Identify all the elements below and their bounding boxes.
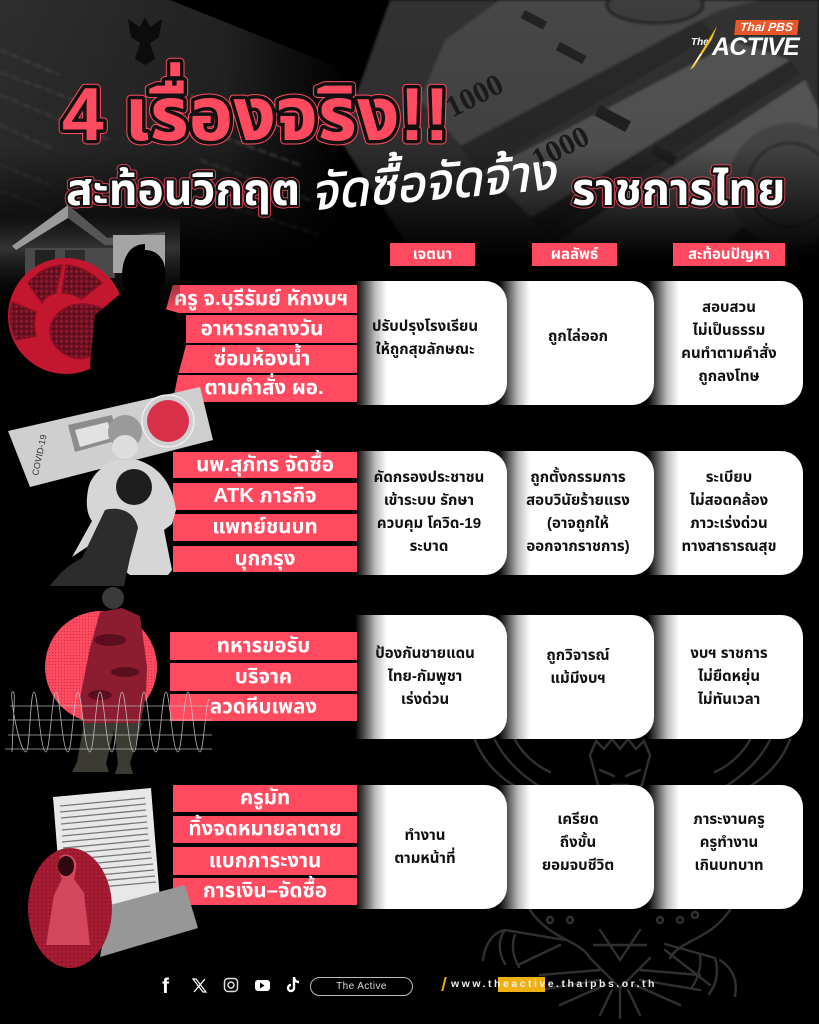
- teacher silhouette: [90, 244, 186, 405]
- row 2 cards: ทางสาธารณสุข: [682, 538, 776, 555]
- house: [0, 205, 180, 310]
- lunch tray: [8, 258, 124, 374]
- row 2 cards: [356, 451, 803, 575]
- logo: Thai PBS The Active: The: [691, 37, 709, 48]
- row 2 labels: นพ.สุภัทร จัดซื้อ: [196, 452, 334, 476]
- row 2 cards: ถูกตั้งกรรมการ: [530, 469, 626, 486]
- title: 4 เรื่องจริง!!: [62, 62, 450, 156]
- red portrait: [28, 848, 112, 968]
- row 4 labels: [173, 785, 357, 905]
- title: ราชการไทย: [572, 164, 785, 215]
- footer social icons: [162, 975, 299, 998]
- row 1 cards: [356, 281, 803, 405]
- row 4 labels: การเงิน–จัดซื้อ: [203, 879, 327, 902]
- row 3 cards: ป้องกันชายแดน: [375, 644, 475, 662]
- row 1 cards: ไม่เป็นธรรม: [693, 322, 765, 339]
- grey envelope: [100, 885, 198, 957]
- row 1 labels: ครู จ.บุรีรัมย์ หักงบฯ: [174, 286, 348, 310]
- row 3 labels: [170, 632, 357, 721]
- row 2 cards: ภาวะเร่งด่วน: [690, 515, 768, 532]
- garuda watermark bottom: [474, 738, 792, 1020]
- row 1 cards: คนทำตามคำสั่ง: [681, 345, 777, 362]
- title: 4 เรื่องจริง!!: [62, 62, 450, 156]
- row 3 cards: ไม่ทันเวลา: [698, 690, 760, 708]
- column headers: [390, 243, 785, 266]
- row 1 labels: อาหารกลางวัน: [201, 316, 323, 340]
- column headers: ผลลัพธ์: [551, 246, 598, 263]
- row 1 labels: ซ่อมห้องน้ำ: [214, 346, 310, 370]
- logo: Thai PBS The Active: [690, 20, 800, 70]
- row 2 labels: ATK ภารกิจ: [213, 484, 317, 507]
- row 2 cards: ไม่สอดคล้อง: [690, 492, 768, 509]
- doctor and patient: [50, 415, 176, 586]
- row 2 cards: สอบวินัยร้ายแรง: [526, 492, 630, 509]
- row 3 cards: งบฯ ราชการ: [690, 644, 768, 662]
- footer website: www.theactive.thaipbs.or.th: [451, 978, 657, 990]
- row 4 cards: เครียด: [557, 810, 599, 828]
- footer pill: The Active: [336, 981, 387, 992]
- row 4 cards: ทำงาน: [404, 827, 445, 844]
- row 3 cards: แม้มีงบฯ: [550, 670, 606, 686]
- row 1 labels: [166, 285, 357, 402]
- row 4 labels: ทิ้งจดหมายลาตาย: [188, 817, 342, 840]
- row 1 cards: ให้ถูกสุขลักษณะ: [376, 341, 474, 358]
- row 3 labels: ทหารขอรับ: [217, 634, 310, 656]
- row 1 labels: ตามคำสั่ง ผอ.: [204, 376, 324, 399]
- title: สะท้อนวิกฤต: [66, 166, 300, 215]
- background photo: document and banknotes: 1000: [526, 120, 595, 176]
- illustration: soldier and barbed wire: [5, 587, 212, 774]
- row 3 cards: เร่งด่วน: [401, 690, 449, 708]
- row 4 cards: ถึงขั้น: [560, 834, 596, 850]
- row 1 cards: ถูกลงโทษ: [698, 368, 760, 385]
- row 4 cards: ภาระงานครู: [693, 810, 765, 828]
- row 3 labels: บริจาค: [235, 664, 292, 688]
- row 1 cards: สอบสวน: [702, 299, 756, 316]
- row 4 cards: [356, 785, 803, 909]
- garuda seal top: [128, 18, 162, 65]
- barbed wire: [5, 692, 212, 752]
- red circle: [45, 611, 157, 723]
- row 4 cards: เกินบทบาท: [694, 856, 764, 874]
- row 2 cards: ควบคุม โควิด-19: [377, 515, 481, 532]
- row 2 labels: บุกกรุง: [235, 546, 295, 570]
- background photo: document and banknotes: [0, 0, 819, 248]
- row 3 cards: ไม่ยืดหยุ่น: [698, 668, 760, 684]
- column headers: สะท้อนปัญหา: [688, 246, 770, 263]
- row 2 cards: ออกจากราชการ): [526, 538, 630, 555]
- row 3 labels: ลวดหีบเพลง: [210, 695, 317, 718]
- row 2 cards: ระบาด: [410, 538, 448, 555]
- row 4 cards: ยอมจบชีวิต: [542, 856, 614, 874]
- row 4 labels: แบกภาระงาน: [209, 848, 321, 872]
- row 2 labels: [173, 450, 357, 572]
- title: [58, 58, 786, 221]
- row 1 cards: ถูกไล่ออก: [548, 328, 608, 344]
- title: สะท้อนวิกฤต: [66, 166, 300, 215]
- row 3 cards: ไทย-กัมพูชา: [388, 668, 462, 684]
- row 2 cards: เข้าระบบ รักษา: [384, 492, 474, 509]
- row 3 cards: ถูกวิจารณ์: [546, 646, 610, 664]
- logo: Thai PBS The Active: Thai PBS: [739, 20, 794, 34]
- ATK test card: [8, 387, 213, 487]
- title: ราชการไทย: [572, 164, 785, 215]
- footer pill: [310, 977, 413, 996]
- row 2 labels: แพทย์ชนบท: [212, 515, 318, 538]
- column headers: เจตนา: [413, 246, 452, 263]
- row 1 cards: ปรับปรุงโรงเรียน: [372, 318, 478, 335]
- title: จัดซื้อจัดจ้าง: [308, 138, 559, 221]
- footer social icons: f: [162, 975, 170, 998]
- illustration: teacher letter: [28, 788, 198, 968]
- soldier: [72, 587, 147, 774]
- letter: [53, 788, 160, 910]
- row 4 labels: ครูมัท: [240, 786, 290, 809]
- row 2 cards: (อาจถูกให้: [547, 515, 609, 532]
- row 3 cards: [356, 615, 803, 739]
- row 2 cards: ระเบียบ: [706, 469, 752, 486]
- illustration: school lunch teacher: [0, 205, 186, 394]
- row 2 cards: คัดกรองประชาชน: [374, 469, 484, 486]
- background photo: document and banknotes: 1000: [440, 68, 509, 124]
- row 4 cards: ตามหน้าที่: [394, 850, 456, 867]
- ATK test card: COVID-19: [30, 434, 49, 476]
- illustration: ATK doctor: [8, 387, 213, 586]
- logo: Thai PBS The Active: ACTIVE: [712, 33, 799, 61]
- row 4 cards: ครูทำงาน: [700, 834, 758, 850]
